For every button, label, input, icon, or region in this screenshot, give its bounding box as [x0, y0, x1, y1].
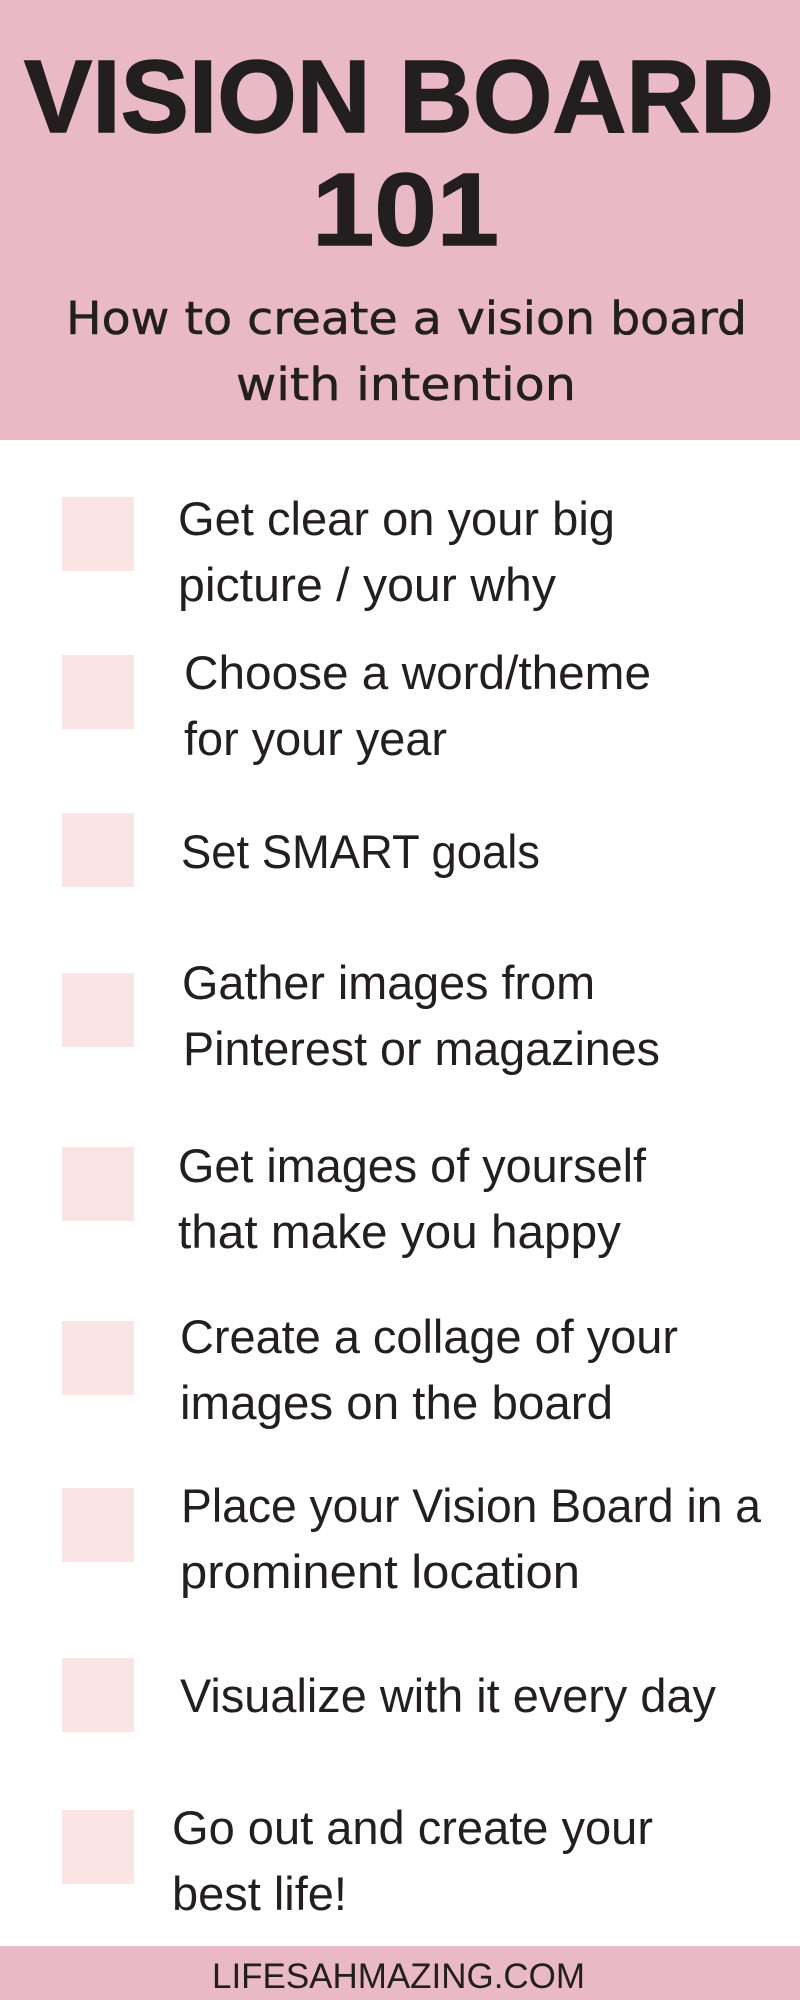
- footer band: [0, 1946, 800, 2000]
- checklist item 4: Pinterest or magazines: [183, 1022, 660, 1075]
- title: 101: [312, 152, 499, 267]
- checklist item 5: [62, 1139, 647, 1258]
- title: [24, 39, 774, 267]
- checklist item 9: Go out and create your: [172, 1801, 653, 1854]
- checklist item 6: Create a collage of your: [180, 1310, 678, 1363]
- checklist item 7: prominent location: [180, 1545, 580, 1598]
- checklist item 2: [62, 646, 651, 765]
- subtitle: [66, 292, 747, 411]
- checklist item 7: [62, 1479, 762, 1598]
- subtitle: with intention: [236, 358, 576, 411]
- checklist item 3: Set SMART goals: [181, 825, 540, 878]
- title: VISION BOARD: [24, 39, 774, 154]
- checklist item 6: [62, 1310, 678, 1429]
- footer band: LIFESAHMAZING.COM: [212, 1957, 585, 1996]
- checklist item 2: Choose a word/theme: [184, 646, 651, 699]
- checklist item 8: [62, 1658, 716, 1732]
- checklist item 9: [62, 1801, 653, 1920]
- checklist item 5: that make you happy: [178, 1205, 621, 1258]
- checklist item 3: [62, 813, 540, 887]
- checklist item 2: for your year: [184, 712, 447, 765]
- checklist item 1: [62, 492, 615, 611]
- checklist item 4: Gather images from: [182, 956, 595, 1009]
- checklist item 1: picture / your why: [178, 558, 557, 611]
- panel: header: [0, 0, 800, 440]
- subtitle: How to create a vision board: [66, 292, 747, 345]
- checklist item 8: Visualize with it every day: [180, 1669, 716, 1722]
- checklist item 5: Get images of yourself: [178, 1139, 647, 1192]
- checklist item 6: images on the board: [180, 1376, 613, 1429]
- checklist item 7: Place your Vision Board in a: [181, 1479, 762, 1532]
- checklist item 9: best life!: [172, 1867, 347, 1920]
- checklist item 4: [62, 956, 660, 1075]
- checklist item 1: Get clear on your big: [178, 492, 615, 545]
